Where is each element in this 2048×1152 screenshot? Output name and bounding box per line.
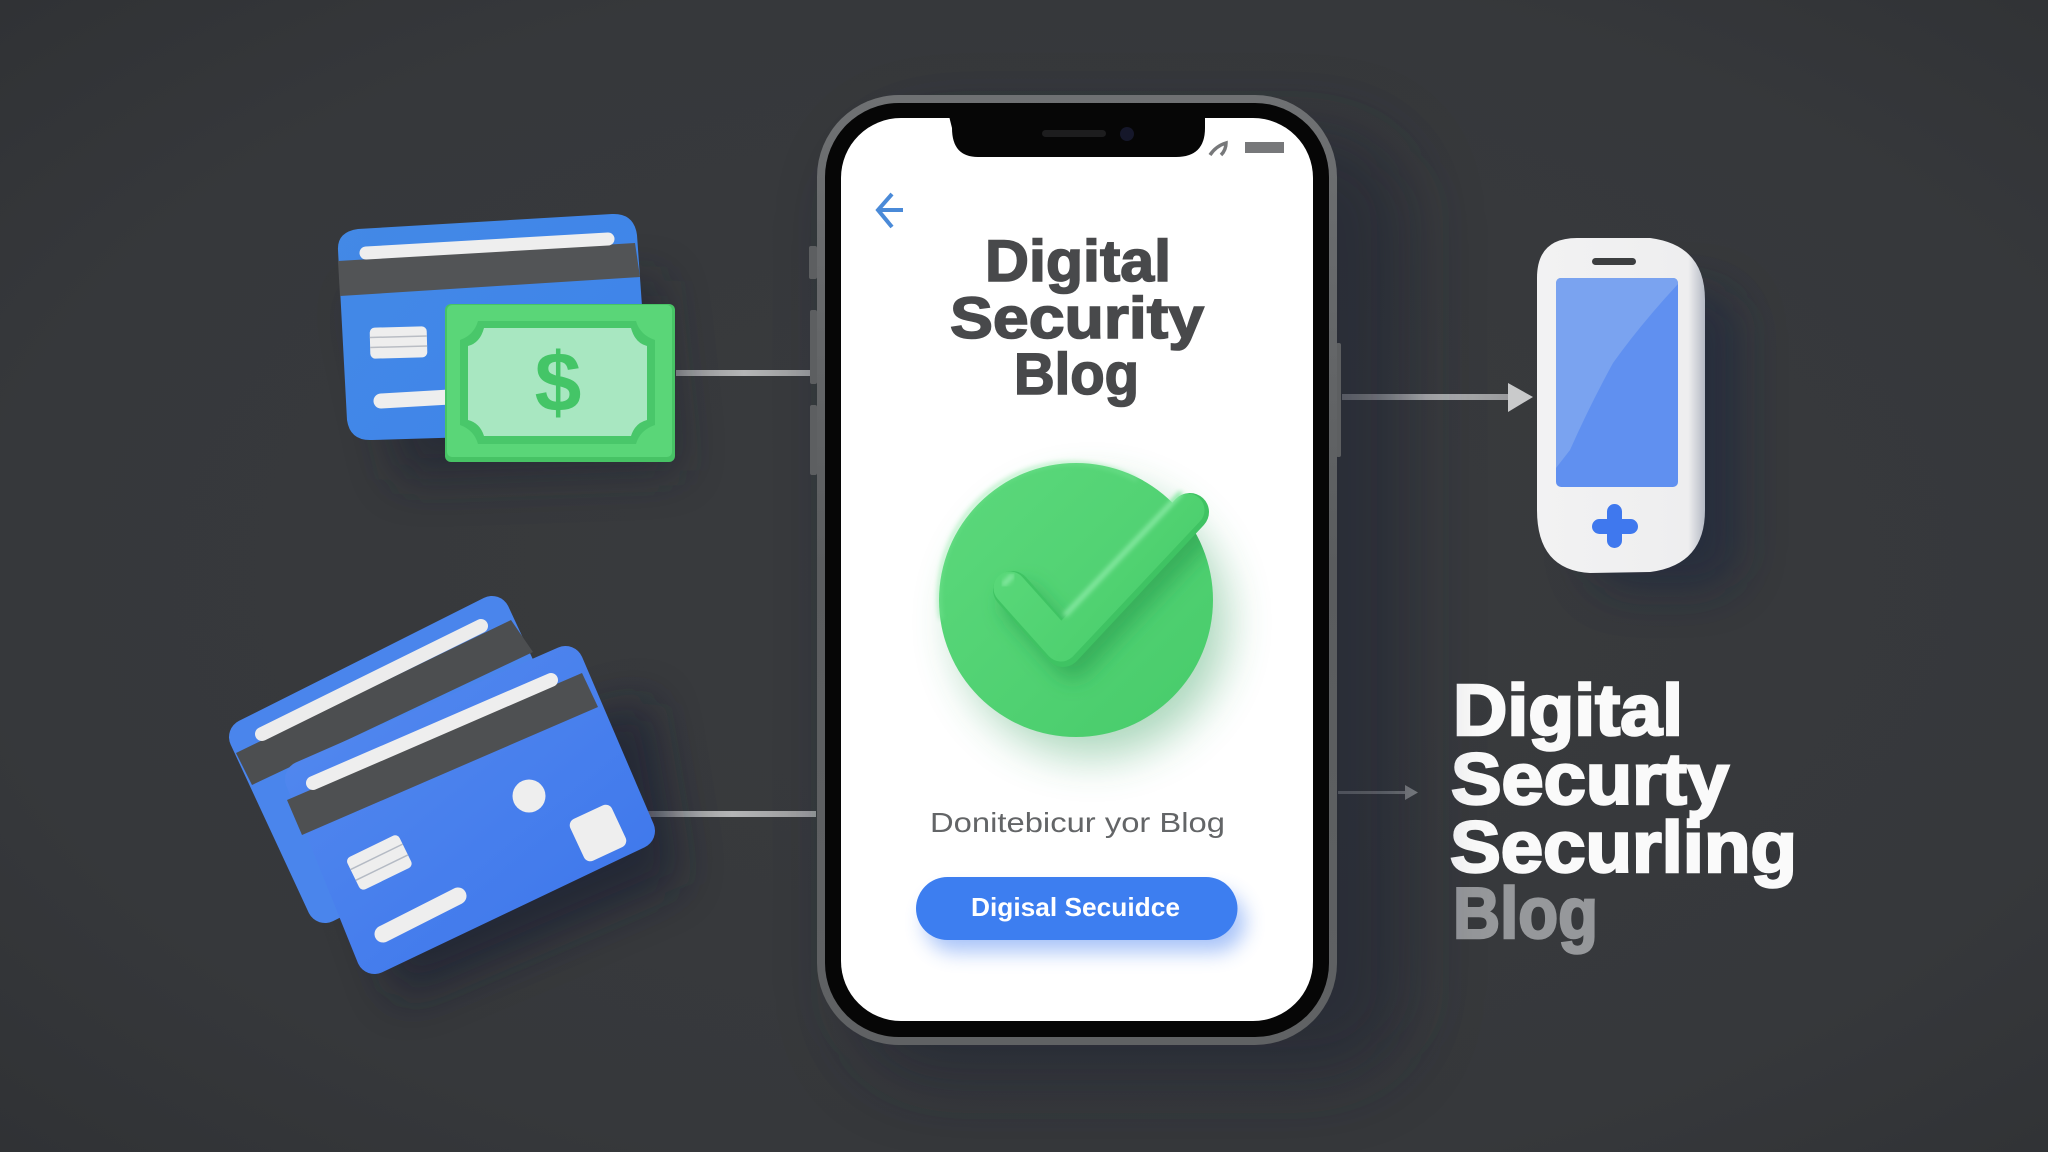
icon: credit card and banknote [338,214,680,480]
heading: digital security securling blog: Blog [1453,874,1598,954]
phone side buttons [809,246,1341,475]
icon: back arrow [878,194,903,227]
title: Security [950,286,1204,351]
icon: plus button [1592,504,1638,548]
button [916,877,1245,952]
heading: digital security securling blog: Securling [1450,808,1797,888]
phone mockup [809,95,1410,1080]
icon: green check badge [918,442,1227,757]
notch [948,112,1205,157]
icon: stacked credit cards [236,614,680,1000]
title: Digital [985,229,1171,294]
connector line: cards to phone [648,811,816,817]
subtitle: Donitebicur yor Blog [930,807,1225,838]
status icon: signal [1210,143,1226,155]
title [950,229,1204,407]
status icon: battery [1245,142,1284,153]
connector line: money to phone [676,370,812,376]
icon: dollar sign: $ [535,335,581,429]
title: Blog [1014,342,1139,407]
phone screen [841,112,1313,1021]
arrow: phone to small device [1342,383,1533,412]
heading: digital security securling blog [1450,671,1797,954]
heading: digital security securling blog: Securty [1451,740,1729,820]
icon: small white phone [1537,238,1740,590]
arrow: phone to heading [1338,785,1418,800]
button: Digisal Secuidce [971,892,1180,922]
heading: digital security securling blog: Digital [1453,671,1683,751]
